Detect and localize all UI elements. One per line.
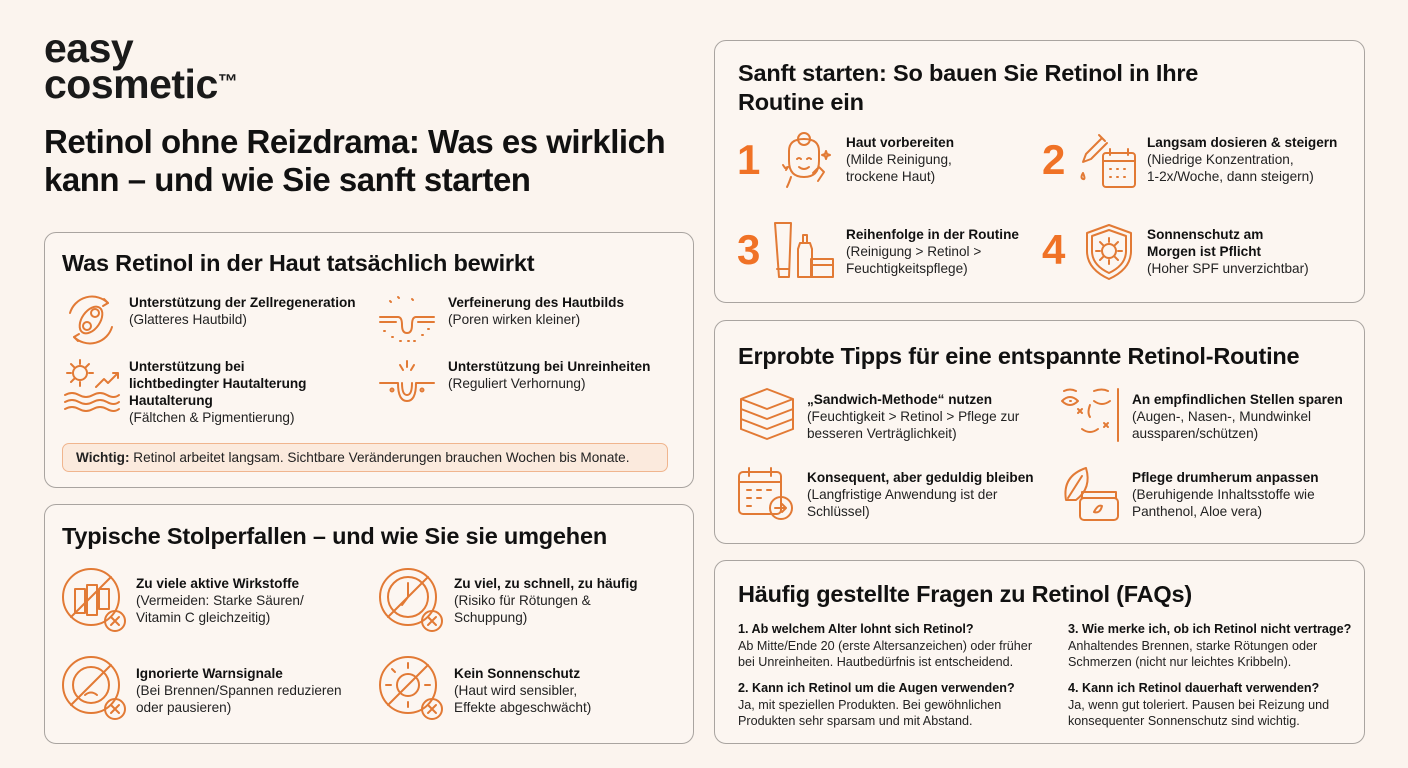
item: Reihenfolge bbox=[846, 227, 1019, 276]
item: Unreinheiten: Unterstützung bei Unreinheiten bbox=[448, 359, 650, 374]
title: Retinol ohne Reizdrama: Was es wirklich bbox=[44, 123, 665, 160]
item: Zellregeneration: (Glatteres Hautbild) bbox=[129, 312, 247, 327]
faq 1: 1. Ab welchem Alter lohnt sich Retinol? bbox=[738, 622, 974, 636]
logo: cosmetic™ bbox=[44, 61, 237, 107]
icon: leaf jar bbox=[1064, 467, 1119, 521]
item: Pflege drumherum: Panthenol, Aloe vera) bbox=[1132, 504, 1262, 519]
icon: clock forbidden bbox=[379, 568, 443, 632]
item: empfindliche Stellen: (Augen-, Nasen-, Mundwinkel bbox=[1132, 409, 1311, 424]
item: Zellregeneration: Unterstützung der Zellregeneration bbox=[129, 295, 356, 310]
faq 4: konsequenter Sonnenschutz sind wichtig. bbox=[1068, 714, 1300, 728]
item: Warnsignale: oder pausieren) bbox=[136, 700, 231, 715]
item: Hautbild bbox=[448, 295, 624, 327]
item: Warnsignale: Ignorierte Warnsignale bbox=[136, 666, 283, 681]
item: Reihenfolge: Reihenfolge in der Routine bbox=[846, 227, 1019, 242]
number 2: 2 bbox=[1042, 136, 1065, 183]
item: Langsam dosieren bbox=[1147, 135, 1337, 184]
item: Haut vorbereiten: (Milde Reinigung, bbox=[846, 152, 952, 167]
number 4: 4 bbox=[1042, 226, 1065, 273]
title: kann – und wie Sie sanft starten bbox=[44, 161, 530, 198]
panel: Was Retinol bewirkt bbox=[44, 232, 694, 488]
number 3: 3 bbox=[737, 226, 760, 273]
item: Konsequent: Schlüssel) bbox=[807, 504, 870, 519]
item: lichtbedingte Hautalterung bbox=[129, 359, 306, 425]
panel: Sanft starten bbox=[714, 40, 1365, 303]
item: Unreinheiten: (Reguliert Verhornung) bbox=[448, 376, 586, 391]
icon: impurity bbox=[379, 360, 435, 402]
heading: Häufig gestellte Fragen zu Retinol (FAQs) bbox=[738, 581, 1192, 607]
faq 2: 2. Kann ich Retinol um die Augen verwenden? bbox=[738, 681, 1015, 695]
item: Langsam dosieren: (Niedrige Konzentration, bbox=[1147, 152, 1294, 167]
item: lichtbedingte Hautalterung: Hautalterung bbox=[129, 393, 213, 408]
item: Haut vorbereiten bbox=[846, 135, 954, 184]
item: zu viel zu schnell: (Risiko für Rötungen & bbox=[454, 593, 591, 608]
item: Sandwich-Methode: „Sandwich-Methode“ nutzen bbox=[807, 392, 992, 407]
item: Sonnenschutz bbox=[1147, 227, 1309, 276]
heading: Sanft starten: So bauen Sie Retinol in Ihre bbox=[738, 60, 1198, 86]
item: Hautbild: Verfeinerung des Hautbilds bbox=[448, 295, 624, 310]
item: Kein Sonnenschutz: Effekte abgeschwächt) bbox=[454, 700, 591, 715]
faq 4: Ja, wenn gut toleriert. Pausen bei Reizung und bbox=[1068, 698, 1329, 712]
icon: face care bbox=[782, 132, 831, 188]
faq 3: Schmerzen (nicht nur leichtes Kribbeln). bbox=[1068, 655, 1291, 669]
item: lichtbedingte Hautalterung: Unterstützung bei bbox=[129, 359, 245, 374]
item: Warnsignale bbox=[136, 666, 342, 715]
item: Reihenfolge: Feuchtigkeitspflege) bbox=[846, 261, 968, 276]
faq 4 bbox=[1068, 681, 1329, 728]
logo bbox=[44, 25, 237, 107]
icon: calendar arrow bbox=[738, 467, 793, 520]
item: Sandwich-Methode: besseren Verträglichkeit) bbox=[807, 426, 957, 441]
icon: dropper calendar bbox=[1080, 134, 1136, 188]
item: Kein Sonnenschutz: Kein Sonnenschutz bbox=[454, 666, 580, 681]
panel: FAQs bbox=[714, 560, 1365, 744]
item: lichtbedingte Hautalterung: lichtbedingter Hautalterung bbox=[129, 376, 306, 391]
item: zu viel zu schnell bbox=[454, 576, 638, 625]
title bbox=[44, 123, 665, 198]
heading: Was Retinol in der Haut tatsächlich bewirkt bbox=[62, 250, 534, 276]
item: Haut vorbereiten: trockene Haut) bbox=[846, 169, 935, 184]
item: Pflege drumherum bbox=[1132, 470, 1319, 519]
item: Sandwich-Methode: (Feuchtigkeit > Retinol > Pflege zur bbox=[807, 409, 1019, 424]
icon: pores bbox=[379, 296, 435, 342]
faq 3: Anhaltendes Brennen, starke Rötungen oder bbox=[1068, 638, 1317, 652]
faq 2: Ja, mit speziellen Produkten. Bei gewöhnlichen bbox=[738, 698, 1001, 712]
logo: easy bbox=[44, 25, 133, 71]
item: Warnsignale: (Bei Brennen/Spannen reduzieren bbox=[136, 683, 342, 698]
item: Kein Sonnenschutz: (Haut wird sensibler, bbox=[454, 683, 577, 698]
item: Hautbild: (Poren wirken kleiner) bbox=[448, 312, 580, 327]
item: Haut vorbereiten: Haut vorbereiten bbox=[846, 135, 954, 150]
faq 2: Produkten sehr sparsam und mit Abstand. bbox=[738, 714, 973, 728]
item: zu viel zu schnell: Zu viel, zu schnell, zu häufig bbox=[454, 576, 638, 591]
faq 4: 4. Kann ich Retinol dauerhaft verwenden? bbox=[1068, 681, 1319, 695]
faq 2 bbox=[738, 681, 1015, 728]
faq 1: bei Unreinheiten. Hautbedürfnis ist entscheidend. bbox=[738, 655, 1013, 669]
heading: Routine ein bbox=[738, 89, 864, 115]
item: Sonnenschutz: Sonnenschutz am bbox=[1147, 227, 1263, 242]
item: empfindliche Stellen bbox=[1132, 392, 1343, 441]
number 1: 1 bbox=[737, 136, 760, 183]
heading: Typische Stolperfallen – und wie Sie sie umgehen bbox=[62, 523, 607, 549]
panel: Erprobte Tipps bbox=[714, 320, 1365, 544]
item: Langsam dosieren: 1-2x/Woche, dann steigern) bbox=[1147, 169, 1314, 184]
callout: Wichtig: Wichtig: Retinol arbeitet langsam. Sichtbare Veränderungen brauchen Wochen bis Monate. bbox=[76, 450, 630, 465]
faq 1 bbox=[738, 622, 1032, 669]
item: lichtbedingte Hautalterung: (Fältchen & Pigmentierung) bbox=[129, 410, 294, 425]
item: Kein Sonnenschutz bbox=[454, 666, 591, 715]
item: Reihenfolge: (Reinigung > Retinol > bbox=[846, 244, 981, 259]
faq 1: Ab Mitte/Ende 20 (erste Altersanzeichen) oder früher bbox=[738, 638, 1032, 652]
icon: sensitive face bbox=[1061, 388, 1119, 442]
item: zu viel zu schnell: Schuppung) bbox=[454, 610, 527, 625]
item: empfindliche Stellen: aussparen/schützen) bbox=[1132, 426, 1258, 441]
heading bbox=[738, 60, 1198, 115]
icon: shield sun bbox=[1086, 224, 1132, 280]
heading: Erprobte Tipps für eine entspannte Retinol-Routine bbox=[738, 343, 1299, 369]
item: aktive Wirkstoffe: Vitamin C gleichzeitig) bbox=[136, 610, 270, 625]
item: aktive Wirkstoffe: Zu viele aktive Wirkstoffe bbox=[136, 576, 299, 591]
icon: face forbidden bbox=[62, 656, 126, 720]
item: Zellregeneration bbox=[129, 295, 356, 327]
icon: bottles forbidden bbox=[62, 568, 126, 632]
item: Unreinheiten bbox=[448, 359, 650, 391]
faq 3: 3. Wie merke ich, ob ich Retinol nicht vertrage? bbox=[1068, 622, 1351, 636]
item: Konsequent bbox=[807, 470, 1034, 519]
item: Sandwich-Methode bbox=[807, 392, 1020, 441]
icon: sandwich layers bbox=[740, 388, 794, 440]
faq 3 bbox=[1068, 622, 1351, 669]
item: aktive Wirkstoffe bbox=[136, 576, 304, 625]
item: Konsequent: Konsequent, aber geduldig bleiben bbox=[807, 470, 1034, 485]
icon: sun forbidden bbox=[379, 656, 443, 720]
item: empfindliche Stellen: An empfindlichen Stellen sparen bbox=[1132, 392, 1343, 407]
item: aktive Wirkstoffe: (Vermeiden: Starke Säuren/ bbox=[136, 593, 304, 608]
icon: sun waves bbox=[64, 359, 120, 412]
item: Langsam dosieren: Langsam dosieren & steigern bbox=[1147, 135, 1337, 150]
panel: Stolperfallen bbox=[44, 504, 694, 744]
callout: Wichtig bbox=[62, 443, 668, 472]
item: Konsequent: (Langfristige Anwendung ist der bbox=[807, 487, 997, 502]
icon: cell regeneration bbox=[69, 296, 113, 344]
item: Sonnenschutz: Morgen ist Pflicht bbox=[1147, 244, 1261, 259]
icon: products bbox=[774, 222, 834, 278]
item: Pflege drumherum: Pflege drumherum anpassen bbox=[1132, 470, 1319, 485]
item: Pflege drumherum: (Beruhigende Inhaltsstoffe wie bbox=[1132, 487, 1315, 502]
item: Sonnenschutz: (Hoher SPF unverzichtbar) bbox=[1147, 261, 1309, 276]
